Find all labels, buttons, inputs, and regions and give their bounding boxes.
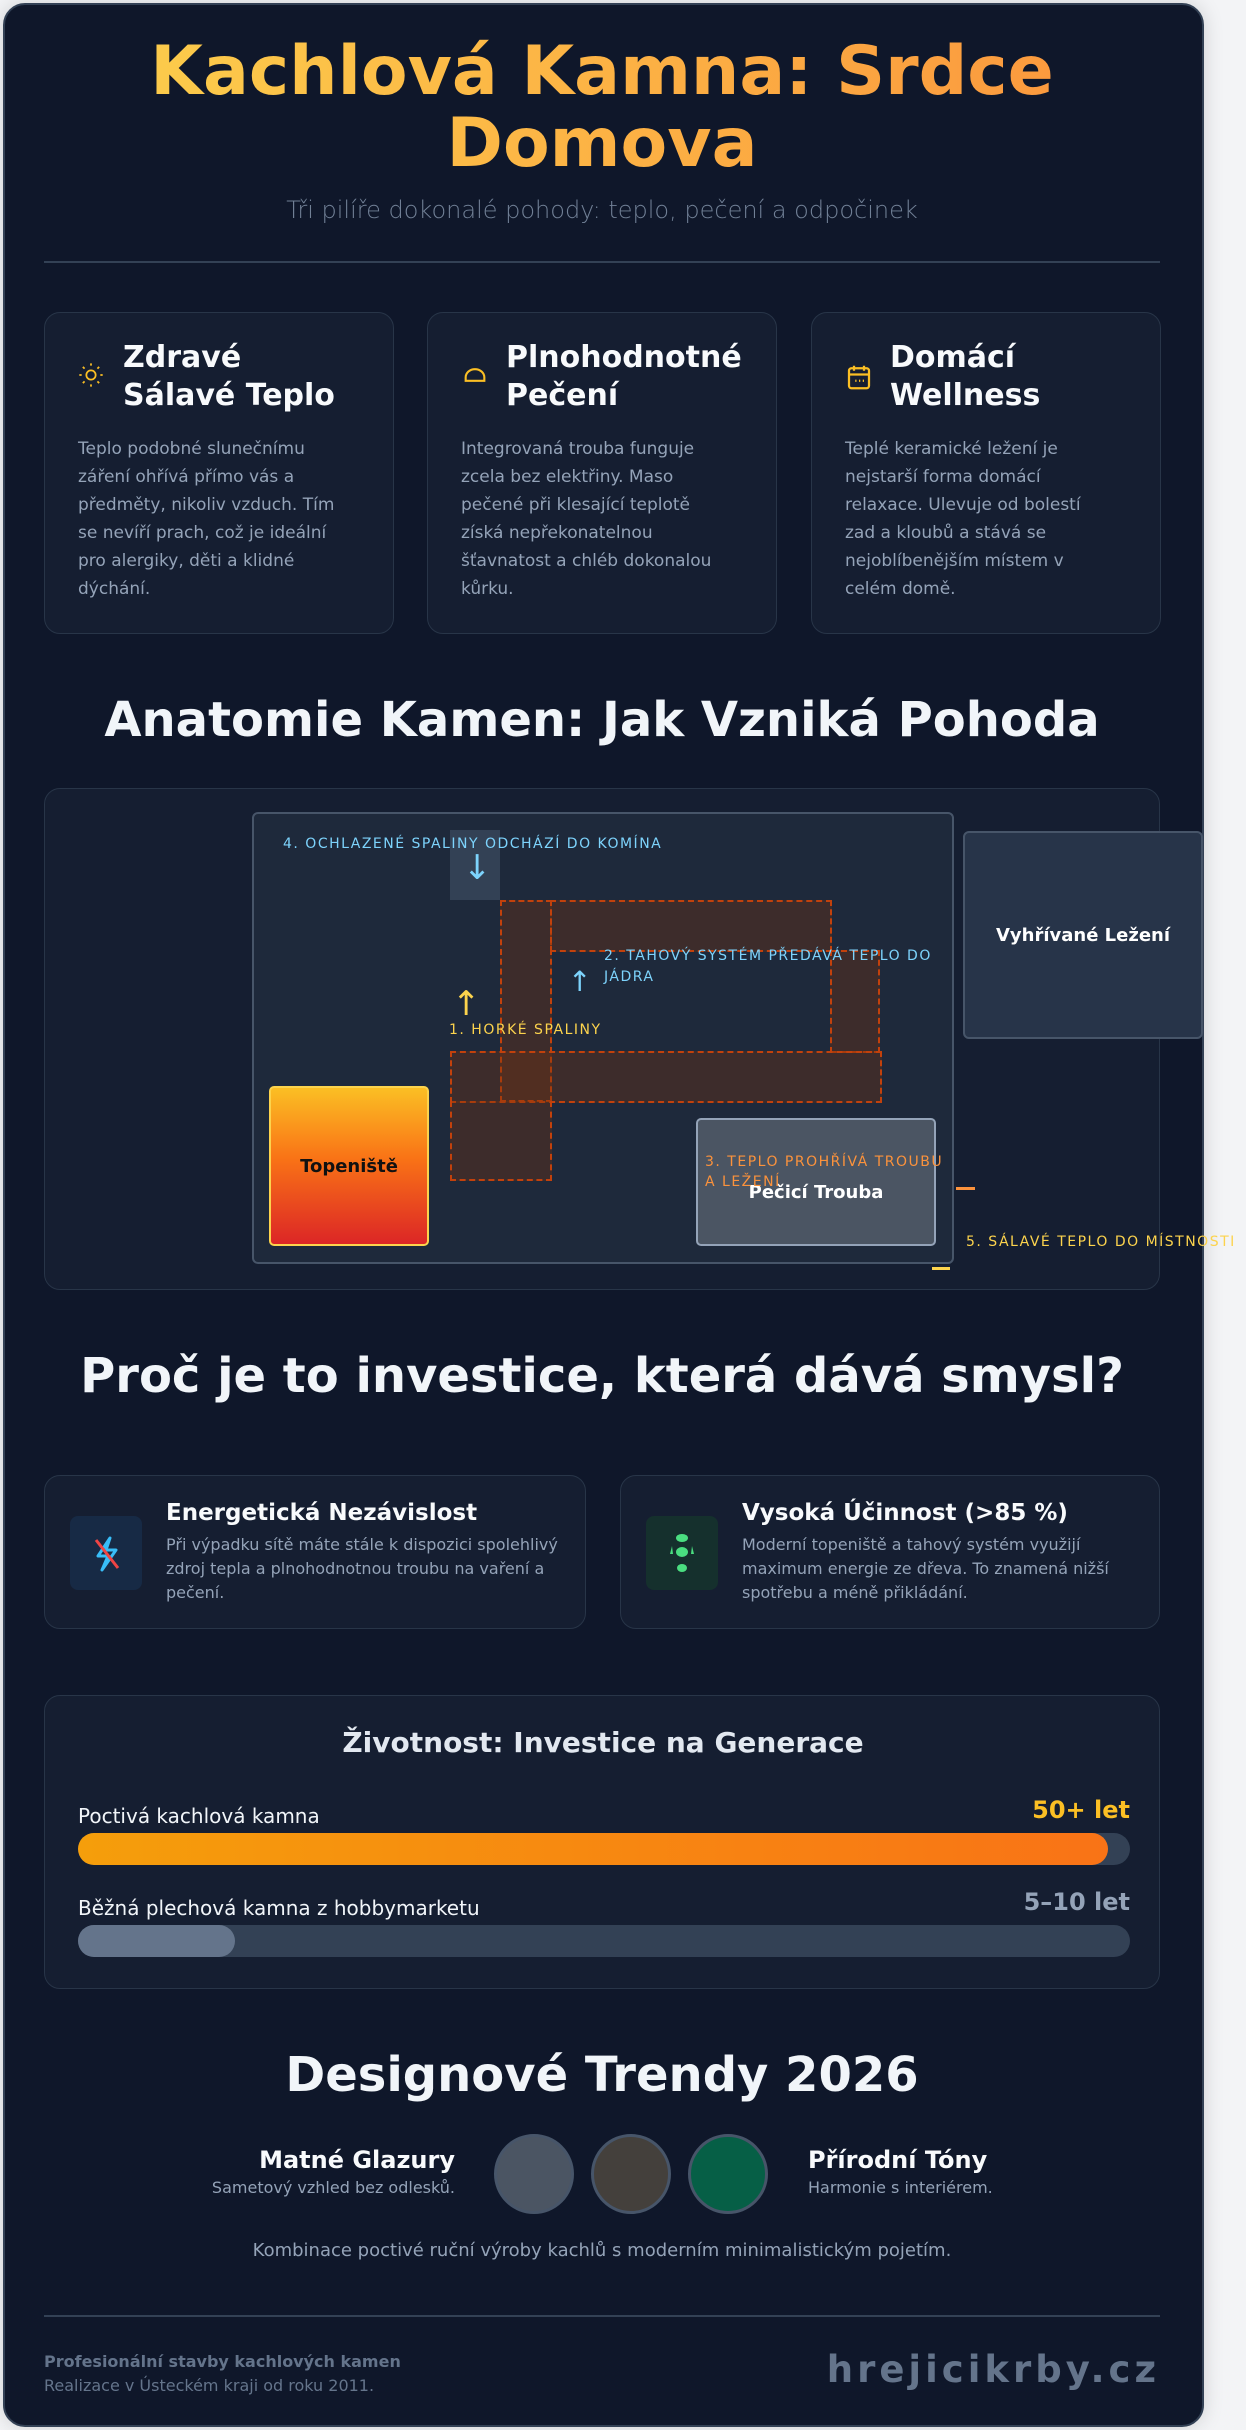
oven: Pečicí Trouba [749,1182,883,1202]
color swatches [494,2134,768,2214]
title [0,36,1204,180]
label 5: 5. SÁLAVÉ TEPLO DO MÍSTNOSTI [966,1234,1236,1250]
title: Kachlová Kamna: Srdce [150,32,1054,111]
panel: lifetime [44,1695,1160,1989]
title: Domova [447,104,757,183]
text: se nevíří prach, což je ideální [78,523,326,543]
panel: wellness [811,312,1161,634]
trend left: Sametový vzhled bez odlesků. [212,2178,455,2197]
heading: Plnohodnotné [506,340,742,375]
heading: trends: Designové Trendy 2026 [285,2047,919,2103]
icon: no power [70,1516,142,1590]
text [844,439,1081,599]
trend right: Harmonie s interiérem. [808,2178,993,2197]
heading [890,340,1040,413]
firebox: Topeniště [300,1156,398,1176]
text: zdroj tepla a plnohodnotnou troubu na vaření a [166,1559,544,1578]
text: pečené při klesající teplotě [461,495,690,515]
bar: sheet stove [78,1888,1130,1957]
icon: recycle [646,1516,718,1590]
title: Vysoká Účinnost (>85 %) [742,1500,1068,1526]
text: celém domě. [845,579,956,599]
panel: efficiency [620,1475,1160,1629]
footer left: Realizace v Ústeckém kraji od roku 2011. [44,2376,374,2395]
text: pro alergiky, děti a klidné [78,551,294,571]
arrow: down: ↓ [463,848,492,888]
bar: tile stove [78,1796,1130,1865]
trend left: Matné Glazury [259,2146,455,2174]
text: získá nepřekonatelnou [461,523,653,543]
label 2: JÁDRA [604,969,654,985]
firebox [269,1086,429,1246]
label 3 [705,1152,943,1190]
heading: Domácí [890,340,1015,375]
caption: Kombinace poctivé ruční výroby kachlů s moderním minimalistickým pojetím. [253,2240,951,2261]
text: spotřebu a méně přikládání. [742,1583,968,1602]
oven [696,1118,936,1246]
heated bench: Vyhřívané Ležení [996,924,1170,946]
bar: sheet stove: 5–10 let [1024,1888,1130,1916]
text [461,439,711,599]
text: předměty, nikoliv vzduch. Tím [78,495,334,515]
text: nejoblíbenějším místem v [845,551,1064,571]
heading: Sálavé Teplo [123,378,335,413]
text [78,439,334,599]
text: Moderní topeniště a tahový systém využijí [742,1535,1080,1554]
text: Teplo podobné slunečnímu [78,439,305,459]
panel: independence [44,1475,586,1629]
arrow: up yellow: ↑ [452,984,480,1024]
text: zcela bez elektřiny. Maso [461,467,673,487]
heading: Zdravé [123,340,241,375]
footer left: Profesionální stavby kachlových kamen [44,2352,401,2371]
bar: tile stove: 50+ let [1032,1796,1130,1824]
title: Energetická Nezávislost [166,1500,477,1526]
flue channels [500,900,552,1102]
heading [506,340,742,413]
panel: healthy heat [44,312,394,634]
label 4: 4. OCHLAZENÉ SPALINY ODCHÁZÍ DO KOMÍNA [283,836,662,852]
chimney [450,830,500,900]
heading: Životnost: Investice na Generace [342,1726,864,1759]
text: zad a kloubů a stává se [845,523,1046,543]
text: Integrovaná trouba funguje [461,439,694,459]
icon: calendar [848,366,870,390]
text: pečení. [166,1583,224,1602]
diagram [252,812,954,1264]
text: šťavnatost a chléb dokonalou [461,551,711,571]
label 1: 1. HORKÉ SPALINY [449,1022,602,1038]
footer brand: hrejicikrby.cz [827,2348,1160,2391]
label 3: 3. TEPLO PROHŘÍVÁ TROUBU [705,1154,943,1170]
text: nejstarší forma domácí [845,467,1041,487]
text: dýchání. [78,579,150,599]
footer left [44,2352,401,2395]
text: záření ohřívá přímo vás a [78,467,294,487]
label 2 [603,946,932,985]
panel: diagram [44,788,1160,1290]
heated bench [963,831,1203,1039]
icon: oven [464,368,486,382]
panel: baking [427,312,777,634]
bar: tile stove: Poctivá kachlová kamna [78,1804,320,1828]
label 2: 2. TAHOVÝ SYSTÉM PŘEDÁVÁ TEPLO DO [604,948,932,964]
text: Teplé keramické ležení je [845,439,1058,459]
bar: sheet stove: Běžná plechová kamna z hobbymarketu [78,1896,480,1920]
text: Při výpadku sítě máte stále k dispozici spolehlivý [166,1535,558,1554]
text: maximum energie ze dřeva. To znamená nižší [742,1559,1109,1578]
text [166,1535,558,1602]
text: relaxace. Ulevuje od bolestí [845,495,1081,515]
icon: sun [79,363,103,387]
trend left [212,2146,455,2197]
text: kůrku. [461,579,514,599]
heading: anatomy: Anatomie Kamen: Jak Vzniká Pohoda [104,692,1100,748]
arrow: up blue: ↑ [568,965,591,998]
text [742,1535,1110,1602]
trend right [808,2146,993,2197]
heading [123,340,335,413]
heading: investment: Proč je to investice, která dává smysl? [80,1348,1124,1404]
heading: Pečení [506,378,618,413]
label 3: A LEŽENÍ [705,1174,781,1190]
heading: Wellness [890,378,1040,413]
subtitle: Tři pilíře dokonalé pohody: teplo, pečení a odpočinek [286,196,918,224]
trend right: Přírodní Tóny [808,2146,987,2174]
